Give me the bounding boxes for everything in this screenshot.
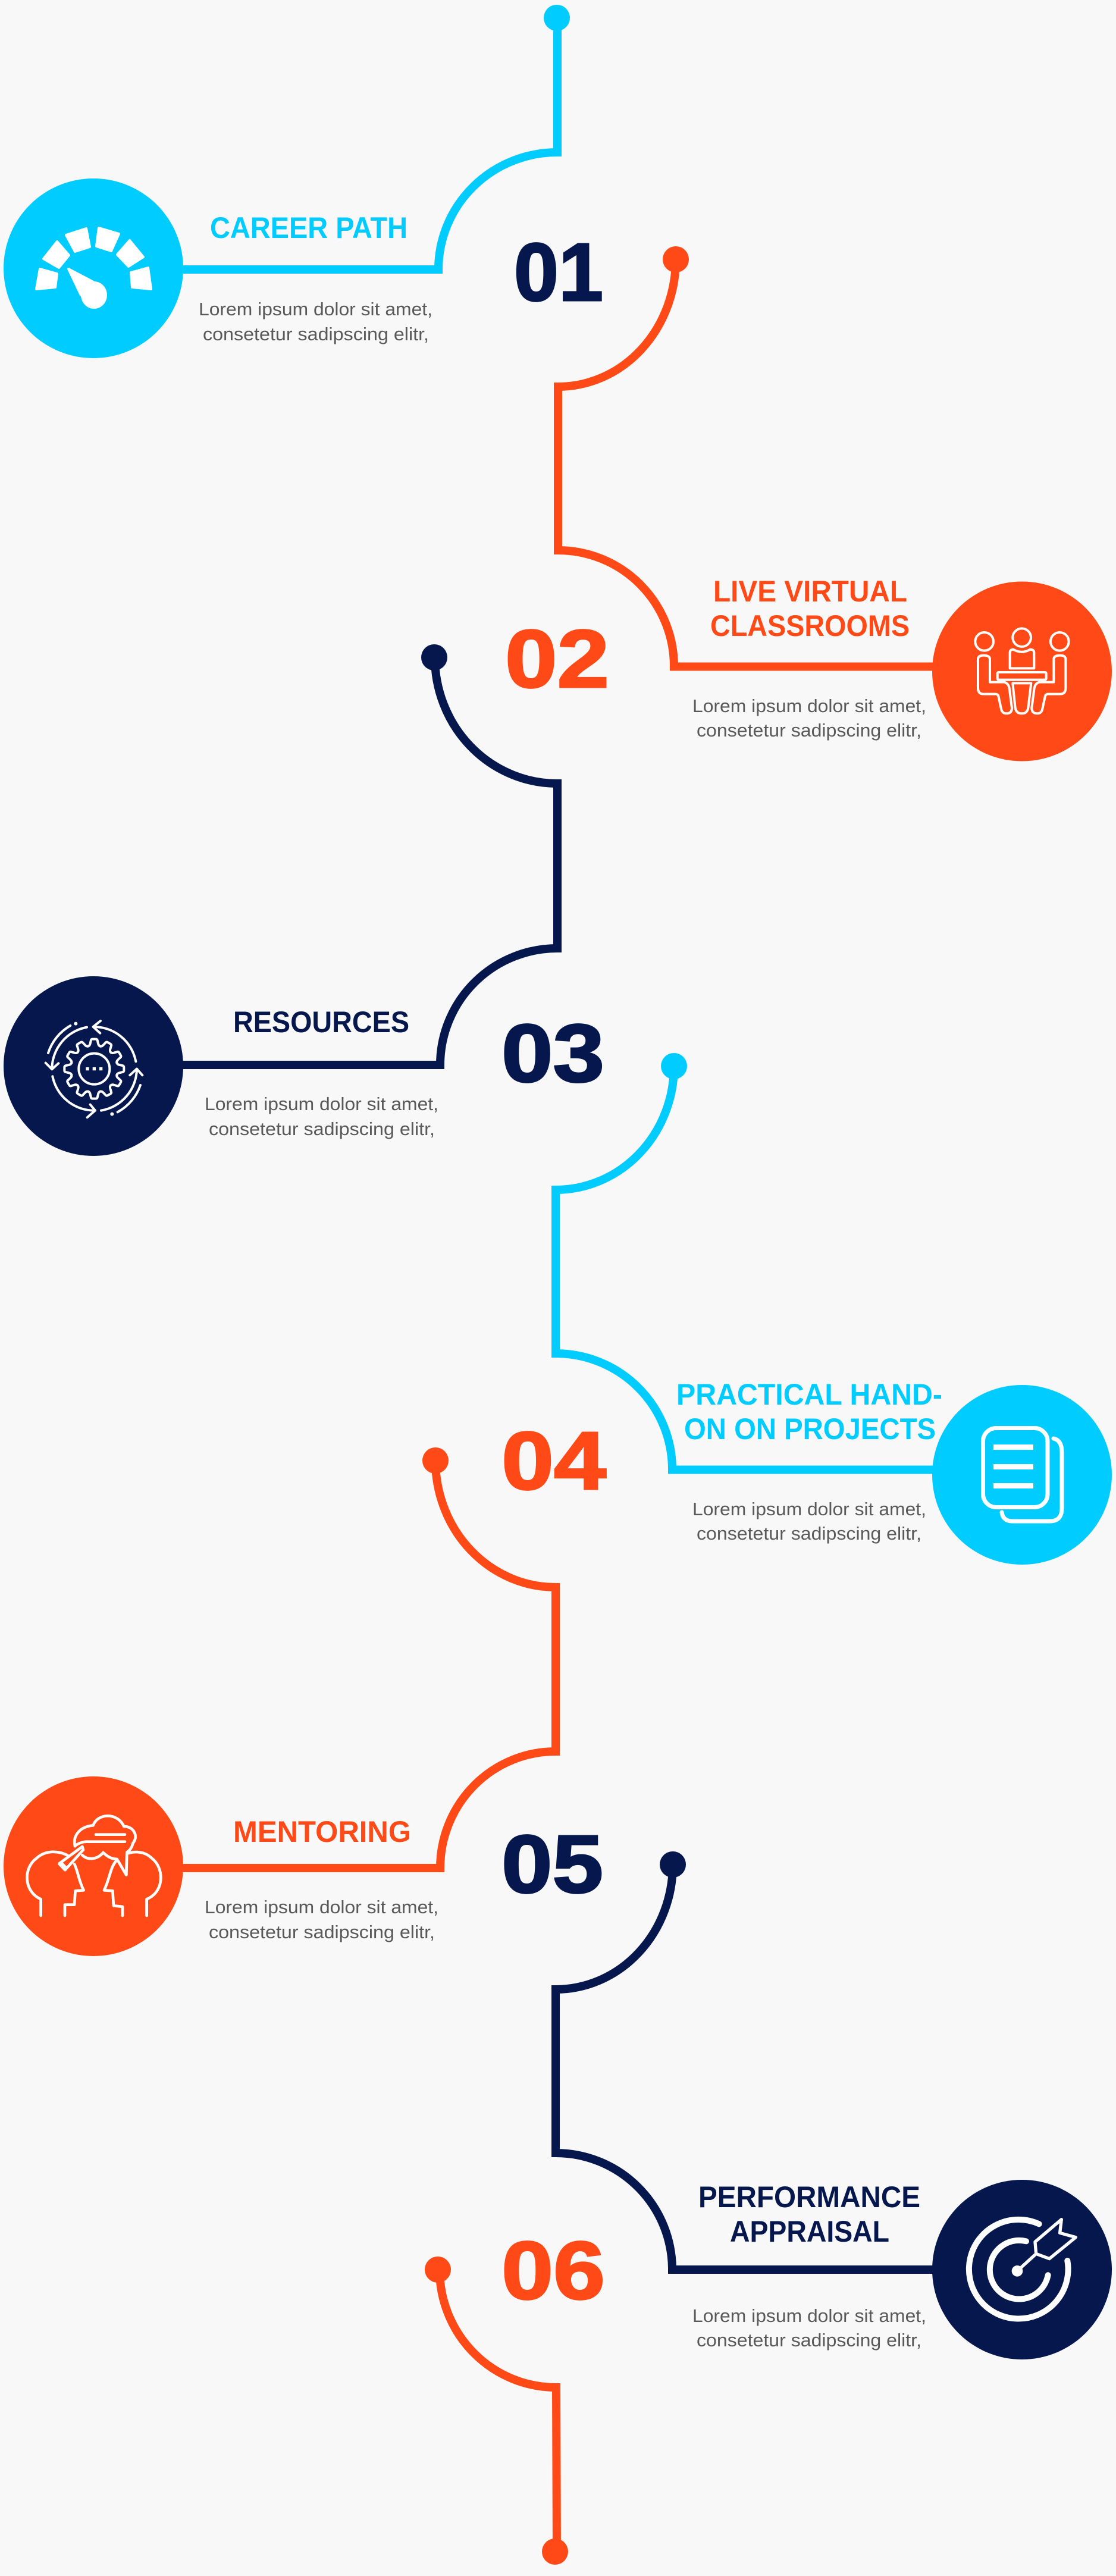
heading: performance appraisal: PERFORMANCE: [698, 2180, 920, 2214]
number 03: 03: [501, 1008, 604, 1099]
body text: Lorem ipsum dolor sit amet,: [692, 2305, 926, 2326]
heading: practical hands-on projects: ON ON PROJECTS: [684, 1412, 936, 1446]
body text: consetetur sadipscing elitr,: [697, 720, 921, 741]
icon: two heads with idea cloud: [4, 1776, 183, 1956]
icon: meeting table: [932, 582, 1112, 761]
icon: gauge: [4, 178, 183, 358]
step 03: resources: [4, 976, 604, 1156]
heading: practical hands-on projects: [676, 1378, 942, 1446]
body text: Lorem ipsum dolor sit amet,: [205, 1897, 438, 1917]
icon: target with arrow: [932, 2180, 1112, 2359]
body text: [205, 1897, 438, 1942]
number 04: 04: [501, 1415, 606, 1507]
heading: resources: RESOURCES: [233, 1005, 409, 1039]
connector: mentoring line: [183, 1447, 556, 1868]
body text: Lorem ipsum dolor sit amet,: [199, 299, 432, 319]
body text: [199, 299, 432, 344]
step 01: career path: [4, 178, 603, 358]
heading: live virtual classrooms: CLASSROOMS: [710, 609, 910, 643]
connector: career path line: [183, 5, 570, 269]
connector: closing line: [425, 2257, 568, 2565]
heading: mentoring: MENTORING: [233, 1815, 411, 1848]
connector: practical projects line: [556, 1053, 934, 1469]
connector: live virtual classrooms line: [558, 246, 934, 666]
body text: Lorem ipsum dolor sit amet,: [692, 1499, 926, 1519]
connector: resources line: [183, 644, 557, 1065]
body text: [692, 1499, 926, 1544]
number 02: 02: [505, 613, 609, 705]
heading: live virtual classrooms: LIVE VIRTUAL: [713, 575, 907, 608]
heading: performance appraisal: APPRAISAL: [730, 2215, 889, 2248]
body text: Lorem ipsum dolor sit amet,: [692, 695, 926, 716]
step 02: live virtual classrooms: [505, 575, 1112, 761]
step 04: practical hands-on projects: [501, 1378, 1112, 1565]
heading: performance appraisal: [698, 2180, 920, 2248]
icon: documents: [932, 1385, 1112, 1565]
body text: [692, 2305, 926, 2351]
body text: consetetur sadipscing elitr,: [697, 1523, 921, 1544]
number 01: 01: [514, 227, 603, 318]
body text: Lorem ipsum dolor sit amet,: [205, 1093, 438, 1114]
icon: gear cycle: [4, 976, 183, 1156]
connector: performance appraisal line: [556, 1851, 934, 2270]
step 05: mentoring: [4, 1776, 603, 1956]
heading: career path: CAREER PATH: [210, 211, 407, 245]
number 06: 06: [501, 2225, 605, 2317]
body text: consetetur sadipscing elitr,: [203, 324, 429, 344]
body text: consetetur sadipscing elitr,: [697, 2330, 921, 2351]
body text: consetetur sadipscing elitr,: [209, 1922, 435, 1942]
step 06: performance appraisal: [501, 2180, 1112, 2359]
heading: practical hands-on projects: PRACTICAL HAND-: [676, 1378, 942, 1411]
body text: [692, 695, 926, 741]
number 05: 05: [501, 1819, 603, 1910]
body text: consetetur sadipscing elitr,: [209, 1118, 435, 1139]
body text: [205, 1093, 438, 1139]
heading: live virtual classrooms: [710, 575, 910, 643]
